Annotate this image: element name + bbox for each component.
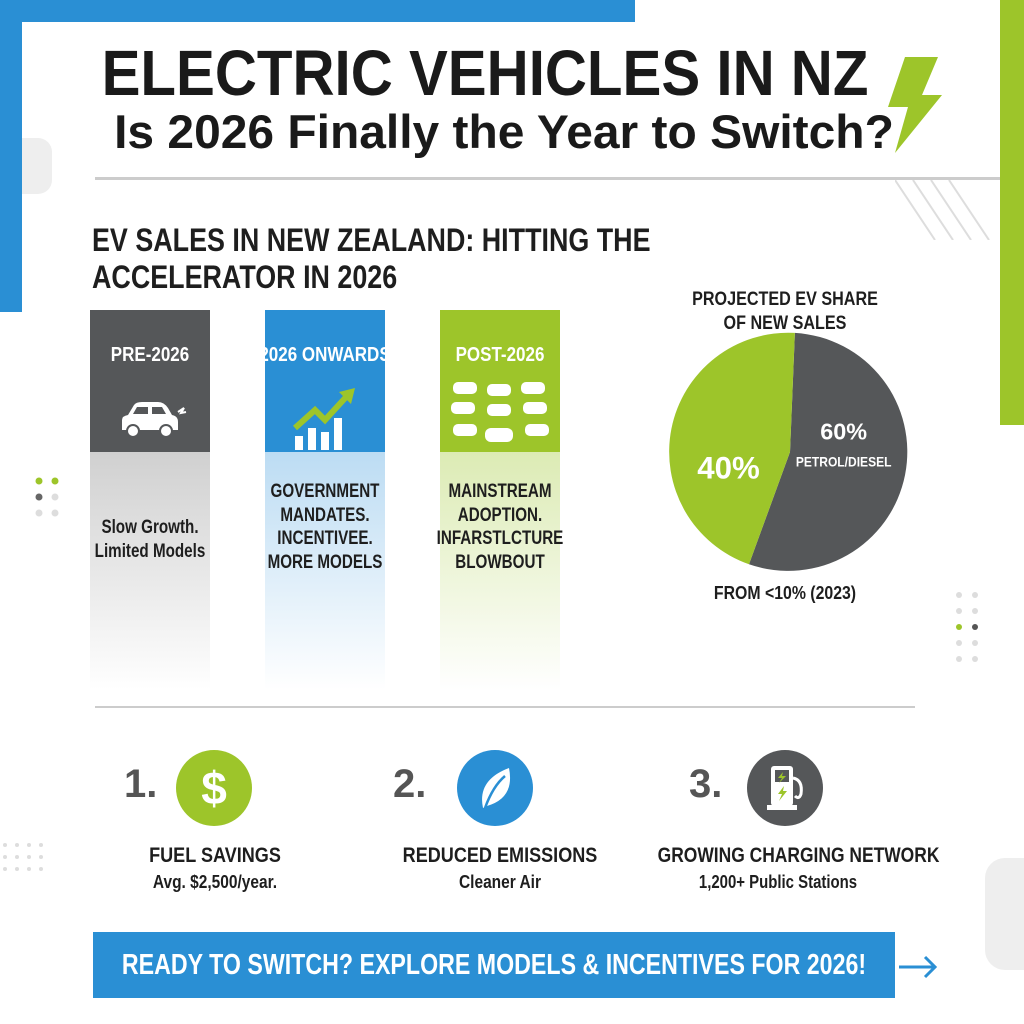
text: charging network bbox=[658, 844, 940, 892]
text: charging network: GROWING CHARGING NETWORK bbox=[658, 844, 939, 867]
header: post-2026: POST-2026 bbox=[456, 344, 544, 366]
slice: petrol/diesel 60% bbox=[749, 333, 907, 571]
decorative hatch bbox=[895, 180, 990, 240]
text: government mandates: INCENTIVEE. bbox=[277, 528, 373, 549]
text: slow growth: Limited Models bbox=[95, 540, 205, 562]
icon: car bbox=[122, 402, 186, 436]
icon: many cars bbox=[451, 382, 549, 442]
call to action banner bbox=[93, 932, 895, 998]
benefit 2: reduced emissions bbox=[393, 750, 597, 892]
decorative frame: right green bar bbox=[1000, 0, 1024, 425]
slice: EV 40%: 40% bbox=[697, 450, 760, 485]
panel: pre-2026 bbox=[90, 310, 210, 650]
icon: leaf bbox=[457, 750, 533, 826]
text: mainstream adoption: ADOPTION. bbox=[458, 504, 542, 526]
text: government mandates bbox=[265, 452, 385, 690]
section heading: ACCELERATOR IN 2026 bbox=[92, 259, 397, 295]
header: pre-2026: PRE-2026 bbox=[111, 344, 189, 366]
arrow bbox=[899, 956, 937, 978]
pie chart bbox=[669, 332, 908, 571]
benefit 1: fuel savings bbox=[124, 750, 281, 892]
text: slow growth: Slow Growth. bbox=[101, 517, 199, 538]
subtitle: Is 2026 Finally the Year to Switch? bbox=[114, 105, 894, 158]
text: reduced emissions: REDUCED EMISSIONS bbox=[403, 844, 597, 867]
text: government mandates: MORE MODELS bbox=[268, 552, 382, 572]
decorative grey tabs bbox=[22, 138, 52, 194]
text: reduced emissions bbox=[403, 844, 597, 892]
slice: petrol/diesel 60%: PETROL/DIESEL bbox=[796, 455, 892, 470]
decorative frame: left blue bar bbox=[0, 0, 22, 312]
text: reduced emissions: Cleaner Air bbox=[459, 872, 541, 892]
decorative dots left bbox=[36, 478, 58, 516]
slice: petrol/diesel 60%: 60% bbox=[820, 418, 867, 444]
pie title: PROJECTED EV SHARE bbox=[692, 289, 878, 310]
text: mainstream adoption: INFARSTLCTURE bbox=[437, 528, 563, 549]
benefit 3: charging network bbox=[658, 750, 940, 892]
text: slow growth bbox=[90, 452, 210, 690]
number 1: 1. bbox=[124, 762, 157, 806]
panel: post-2026 bbox=[437, 310, 563, 664]
title: ELECTRIC VEHICLES IN NZ bbox=[102, 37, 868, 109]
icon: charger bbox=[747, 750, 823, 826]
icon: dollar: $ bbox=[201, 762, 227, 814]
header: pre-2026 bbox=[90, 310, 210, 452]
text: government mandates: GOVERNMENT bbox=[271, 481, 379, 502]
text: government mandates: MANDATES. bbox=[280, 504, 370, 526]
divider bbox=[95, 177, 1000, 180]
text: fuel savings: Avg. $2,500/year. bbox=[153, 872, 277, 892]
panel: 2026 onwards bbox=[259, 310, 391, 662]
header: 2026 onwards: 2026 ONWARDS bbox=[259, 344, 391, 366]
CTA text: READY TO SWITCH? EXPLORE MODELS & INCENTIVES FOR 2026! bbox=[122, 949, 866, 981]
decorative dots bottom-left bbox=[3, 843, 43, 871]
section heading bbox=[92, 222, 651, 295]
decorative frame: top blue bar bbox=[0, 0, 635, 22]
icon: rising chart bbox=[293, 388, 355, 450]
icon: lightning bolt bbox=[888, 57, 942, 153]
number 3: 3. bbox=[689, 762, 722, 806]
divider bbox=[95, 706, 915, 708]
text: mainstream adoption: MAINSTREAM bbox=[448, 481, 552, 502]
text: charging network: 1,200+ Public Stations bbox=[699, 872, 857, 892]
slice: EV 40% bbox=[669, 333, 795, 564]
icon: dollar bbox=[176, 750, 252, 826]
pie title: OF NEW SALES bbox=[724, 313, 846, 334]
section heading: EV SALES IN NEW ZEALAND: HITTING THE bbox=[92, 222, 651, 258]
header: post-2026 bbox=[440, 310, 560, 452]
text: fuel savings: FUEL SAVINGS bbox=[149, 844, 281, 867]
pie title bbox=[692, 289, 878, 334]
text: mainstream adoption bbox=[440, 452, 560, 690]
text: fuel savings bbox=[149, 844, 281, 892]
decorative dots right bbox=[956, 592, 978, 662]
number 2: 2. bbox=[393, 762, 426, 806]
pie caption: FROM <10% (2023) bbox=[714, 583, 856, 603]
header: 2026 onwards bbox=[265, 310, 385, 452]
text: mainstream adoption: BLOWBOUT bbox=[455, 552, 545, 572]
